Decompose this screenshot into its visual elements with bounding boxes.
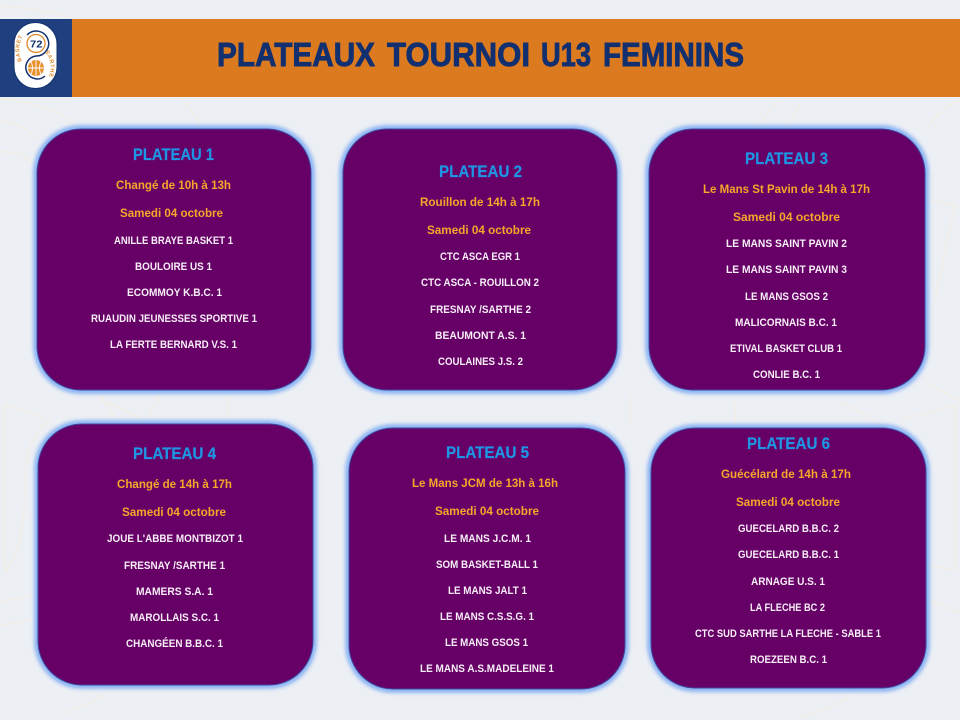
header band: [0, 19, 960, 97]
teams list: LE MANS JALT 1: [448, 585, 527, 597]
title: FEMININS: [603, 36, 744, 73]
title: U13: [541, 36, 591, 73]
heading: plateau 2: PLATEAU 2: [439, 163, 522, 181]
teams list: LE MANS GSOS 1: [445, 637, 528, 649]
teams list: MALICORNAIS B.C. 1: [735, 317, 837, 329]
teams list: ROEZEEN B.C. 1: [750, 654, 827, 666]
icon: Basket Sarthe 72 logo: 72: [30, 40, 43, 50]
icon: Basket Sarthe 72 logo: SARTHE: [46, 50, 54, 78]
title: PLATEAUX: [217, 36, 375, 73]
date: Samedi 04 octobre: [733, 212, 840, 224]
teams list: CHANGÉEN B.B.C. 1: [126, 637, 223, 650]
teams list: FRESNAY /SARTHE 1: [124, 560, 225, 572]
teams list: [91, 235, 257, 351]
teams list: [420, 533, 554, 675]
venue and time: Guécélard de 14h à 17h: [721, 469, 851, 481]
heading: plateau 6: PLATEAU 6: [747, 435, 830, 453]
teams list: LA FLECHE BC 2: [750, 602, 825, 614]
teams list: ETIVAL BASKET CLUB 1: [730, 343, 842, 355]
teams list: [107, 533, 243, 650]
teams list: [421, 251, 539, 368]
venue and time: Le Mans JCM de 13h à 16h: [412, 478, 558, 490]
teams list: BOULOIRE US 1: [135, 261, 212, 273]
teams list: RUAUDIN JEUNESSES SPORTIVE 1: [91, 313, 257, 325]
teams list: MAMERS S.A. 1: [136, 586, 213, 598]
teams list: ARNAGE U.S. 1: [751, 576, 825, 588]
logo background: [0, 19, 72, 97]
panel: plateau 4: [38, 424, 313, 685]
date: Samedi 04 octobre: [122, 507, 226, 519]
teams list: LE MANS A.S.MADELEINE 1: [420, 663, 554, 675]
teams list: CTC ASCA - ROUILLON 2: [421, 277, 539, 289]
teams list: CTC ASCA EGR 1: [440, 251, 520, 263]
teams list: LA FERTE BERNARD V.S. 1: [110, 339, 237, 351]
teams list: [695, 523, 881, 666]
teams list: FRESNAY /SARTHE 2: [430, 304, 531, 316]
teams list: GUECELARD B.B.C. 1: [738, 549, 839, 561]
panel: plateau 3: [649, 129, 925, 390]
teams list: LE MANS SAINT PAVIN 3: [726, 264, 847, 276]
date: Samedi 04 octobre: [435, 506, 539, 518]
teams list: GUECELARD B.B.C. 2: [738, 523, 839, 535]
heading: plateau 5: PLATEAU 5: [446, 444, 529, 462]
teams list: ANILLE BRAYE BASKET 1: [114, 235, 233, 247]
heading: plateau 3: PLATEAU 3: [745, 150, 828, 168]
teams list: BEAUMONT A.S. 1: [435, 330, 526, 342]
teams list: LE MANS C.S.S.G. 1: [440, 611, 534, 623]
panel: plateau 5: [349, 428, 625, 689]
teams list: SOM BASKET-BALL 1: [436, 559, 538, 571]
teams list: ECOMMOY K.B.C. 1: [127, 287, 222, 299]
teams list: LE MANS J.C.M. 1: [444, 533, 531, 545]
panel: plateau 2: [343, 129, 617, 390]
teams list: COULAINES J.S. 2: [438, 356, 523, 368]
icon: Basket Sarthe 72 logo: BASKET: [15, 34, 22, 62]
panel: plateau 6: [651, 428, 926, 688]
teams list: CTC SUD SARTHE LA FLECHE - SABLE 1: [695, 628, 881, 640]
date: Samedi 04 octobre: [736, 497, 840, 509]
teams list: [726, 238, 847, 381]
panel: plateau 1: [37, 129, 311, 390]
orange title bar: [72, 19, 960, 97]
teams list: MAROLLAIS S.C. 1: [130, 612, 219, 624]
title: TOURNOI: [387, 36, 530, 73]
teams list: LE MANS SAINT PAVIN 2: [726, 238, 847, 250]
title: [217, 36, 744, 73]
venue and time: Changé de 14h à 17h: [117, 479, 232, 491]
teams list: JOUE L'ABBE MONTBIZOT 1: [107, 533, 243, 545]
heading: plateau 4: PLATEAU 4: [133, 445, 217, 463]
teams list: CONLIE B.C. 1: [753, 369, 820, 381]
venue and time: Rouillon de 14h à 17h: [420, 197, 540, 209]
heading: plateau 1: PLATEAU 1: [133, 146, 214, 164]
date: Samedi 04 octobre: [427, 225, 531, 237]
teams list: LE MANS GSOS 2: [745, 291, 828, 303]
date: Samedi 04 octobre: [120, 208, 223, 220]
venue and time: Le Mans St Pavin de 14h à 17h: [703, 184, 870, 196]
venue and time: Changé de 10h à 13h: [116, 180, 231, 192]
icon: Basket Sarthe 72 logo: [14, 22, 58, 89]
